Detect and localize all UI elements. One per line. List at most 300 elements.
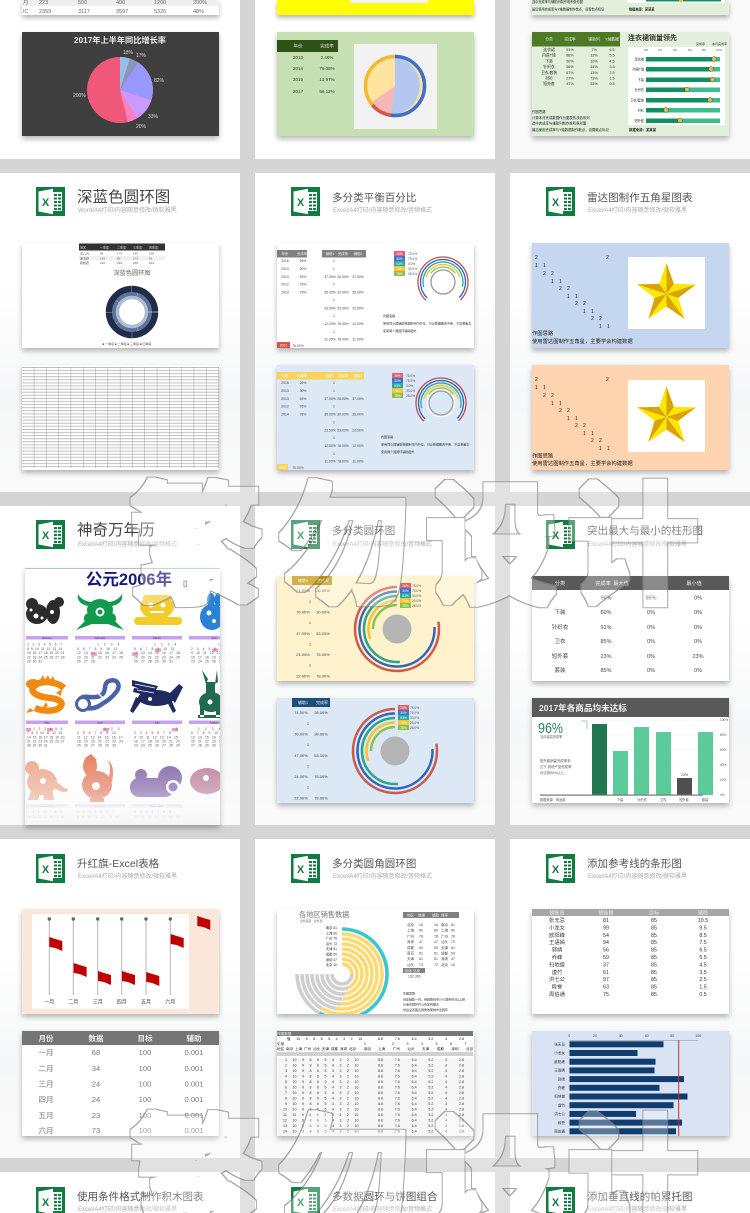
table rows: 100 xyxy=(139,1080,151,1088)
table rows: 扫地僧 xyxy=(549,960,565,968)
legend: 75.0% xyxy=(412,589,421,593)
table: year and completion: 26% xyxy=(300,259,306,263)
table: category data: 2.5 xyxy=(609,71,615,75)
panel: bar chart fragment: 选中完成率与辅助列制作堆积条形图 xyxy=(532,0,583,4)
table: year and completion: 1 xyxy=(333,282,335,286)
icon: zodiac pig xyxy=(190,768,224,794)
data table: 78 xyxy=(434,934,438,938)
text: notes: 使用两个圆圆环辅助图外 xyxy=(383,328,417,333)
icon: zodiac dragon xyxy=(26,675,64,713)
calendar: first row of months: February xyxy=(94,636,106,640)
text: notes xyxy=(383,313,471,333)
header: 深蓝色圆环图 xyxy=(36,187,177,216)
text: notes: 使用同心圆辅助数据制作内外位，可让数据图表平衡，不显著差太 xyxy=(381,442,469,446)
stacked bar chart: 针织衣 xyxy=(634,87,645,92)
header: 多数据圆环与饼图组合: Excel/A4打印/内容随意修改/音频格式 xyxy=(333,1207,432,1213)
chart: concentric arcs xyxy=(408,247,478,317)
table: year and completion: 2014 xyxy=(281,412,289,416)
table rows: 短外套 xyxy=(552,652,569,660)
sheet header rows xyxy=(277,1031,481,1056)
data table: 47 xyxy=(451,957,455,961)
table: helper values: 26.00% xyxy=(314,710,328,715)
table: helper values: 完成率 xyxy=(316,699,328,705)
table: category data: 7% xyxy=(591,48,597,52)
data table: 50 xyxy=(434,946,438,950)
table: category data: 13% xyxy=(590,71,598,75)
panel: empty spreadsheet grid xyxy=(22,365,219,470)
table: helper values: 26.00% xyxy=(316,588,330,593)
table: quarterly data: 二季度 xyxy=(117,244,126,250)
data table: 80 xyxy=(451,929,455,933)
table rows: 63 xyxy=(603,985,609,991)
table rows: 37 xyxy=(603,962,609,968)
text: notes: 作图思路 xyxy=(532,452,554,460)
card: row 4 right xyxy=(510,1172,750,1213)
table rows: 94 xyxy=(603,940,609,946)
axis: 0 xyxy=(568,1034,570,1038)
number series: 1 xyxy=(551,279,554,285)
number series: 1 xyxy=(607,324,610,330)
table: helper values: 74.00% xyxy=(294,710,308,715)
legend: 28.0% xyxy=(406,394,415,398)
table rows: 85 xyxy=(651,970,657,976)
number series: 1 xyxy=(567,416,570,422)
legend: 76% xyxy=(400,721,407,725)
table: year and completion: 37.00% xyxy=(352,397,364,401)
text: notes: 然后设置图表圆角效果制作出圆环 xyxy=(403,1007,448,1012)
calendar: first row of months: January xyxy=(42,636,53,640)
sheet header rows: 地区 南京 上海 广州 汕头 天津 成都 深圳 北京 xyxy=(277,1046,356,1051)
panel: rounded radial chart xyxy=(277,909,474,1014)
table: quarterly data: 地区 xyxy=(80,244,86,250)
tag: 2017 value xyxy=(277,464,304,470)
pie labels: 82% xyxy=(154,78,165,84)
number series: 1 xyxy=(591,431,594,437)
panel: max and min table xyxy=(532,576,729,681)
text: notes xyxy=(403,990,465,1012)
table: helper values: 1 xyxy=(309,642,312,646)
table rows: 二月 xyxy=(38,1064,54,1073)
table: year and completion: 23.50% xyxy=(352,306,364,310)
data table: 81 xyxy=(419,952,423,956)
header: 多分类圆环图: Excel/A4打印/内容随意修改/音频格式 xyxy=(333,542,432,548)
header: 添加垂直线的帕累托图: 添加垂直线的帕累托图 xyxy=(587,1191,692,1203)
table header: 分类 xyxy=(555,579,565,587)
panel: perpetual calendar xyxy=(25,568,220,825)
donut chart: navy rings xyxy=(109,289,155,335)
text: description xyxy=(540,758,572,775)
text: notes: 作图思路 xyxy=(403,990,415,996)
table: year and completion: 1 xyxy=(333,298,335,302)
panel: bar chart with reference line xyxy=(532,1031,729,1136)
data table: 南京 xyxy=(441,922,448,927)
table: completion rate by year: 完成率 xyxy=(320,42,334,50)
data table: 73 xyxy=(451,940,455,944)
calendar: third row of months: 10 11 12 13 14 15 16 xyxy=(134,815,180,819)
legend: 75.0% xyxy=(406,374,415,378)
table: year and completion: 35.00% xyxy=(352,290,364,294)
watermark: repeated outlined brand text: 繁 xyxy=(131,474,261,620)
number series: 2 xyxy=(567,408,570,414)
table rows: 三月 xyxy=(38,1080,54,1088)
data table: 50 xyxy=(419,946,423,950)
panel: partial data table top left: 48% xyxy=(193,9,204,15)
panel: bar chart fragment: 最后使用完成率与Y轴数据制作散点，设置散点标记 xyxy=(532,6,605,12)
sheet data rows: 12 10 9 8 6 5 4 3 2 10 xyxy=(283,1118,358,1122)
pie labels xyxy=(73,50,165,130)
table rows: 0% xyxy=(647,639,655,645)
table header: 月份 xyxy=(38,1033,54,1043)
table: category data: 分类 xyxy=(545,36,553,42)
stacked bar chart: 0% xyxy=(644,48,648,52)
table rows: 一月 xyxy=(38,1048,54,1057)
table rows: 85 xyxy=(651,962,657,968)
axis labels: 短外套 xyxy=(679,797,690,802)
table: helper values: 30.00% xyxy=(316,610,330,614)
table header: 销售员 xyxy=(549,910,565,916)
calendar: first row of months: April xyxy=(211,636,217,640)
stacked bar chart: 2% xyxy=(658,48,662,52)
table rows: 虚竹 xyxy=(552,968,563,976)
table rows: 0.001 xyxy=(184,1080,204,1088)
panel: dark pie chart xyxy=(22,32,219,136)
data table: 辅助 xyxy=(432,912,440,918)
table: year and completion: 26.00% xyxy=(337,397,349,401)
panel: navy donut chart xyxy=(22,243,219,348)
table rows: 100 xyxy=(139,1111,151,1120)
data table: 50 xyxy=(451,952,455,956)
header: 升红旗-Excel表格 xyxy=(36,854,177,883)
table: category data: 53% xyxy=(590,82,598,86)
header: 使用条件格式制作积木图表: 使用条件格式制作积木图表 xyxy=(77,1191,204,1203)
table: helper values: 47.00% xyxy=(296,631,310,636)
table rows: 60% xyxy=(600,610,612,616)
table rows: 六月 xyxy=(38,1125,54,1135)
table: helper values: 1 xyxy=(307,742,310,747)
bar labels: 周伯通 xyxy=(554,1128,565,1134)
card: row 0 right xyxy=(510,0,750,159)
legend xyxy=(392,373,415,398)
panel: dress sales chart xyxy=(532,32,729,136)
number series: 2 xyxy=(559,286,562,292)
legend: 33.0% xyxy=(410,716,419,720)
table: year and completion: 完成率 xyxy=(338,373,349,378)
legend: 30% xyxy=(402,589,409,593)
table: helper values: 1 xyxy=(309,599,312,604)
data table: 天津 xyxy=(441,945,448,950)
bar labels: 洪七公 xyxy=(554,1111,565,1116)
legend: 26% xyxy=(394,374,401,378)
number series: 1 xyxy=(599,324,602,330)
number series: 1 xyxy=(543,385,546,391)
legend xyxy=(696,41,727,46)
legend: 75.0% xyxy=(412,584,421,588)
legend: 53% xyxy=(396,262,403,266)
bar labels xyxy=(554,1042,565,1134)
legend: 33.0% xyxy=(408,267,417,271)
table rows: 小龙女 xyxy=(549,923,565,931)
calendar: first row of months: 12 13 14 15 16 17 18 xyxy=(134,651,180,655)
table: category data: Y轴数据 xyxy=(605,36,619,42)
table rows: 100 xyxy=(139,1048,151,1057)
number series: 2 xyxy=(599,316,602,322)
icon: zodiac tiger xyxy=(134,595,182,625)
number series: 1 xyxy=(583,431,586,437)
table: helper values: 24.00% xyxy=(296,652,310,657)
table rows: 周伯通 xyxy=(549,990,566,998)
number series: 2 xyxy=(599,438,602,444)
data table: 16 xyxy=(419,923,423,927)
header: 使用条件格式制作积木图表: Excel/A4打印/内容随意修改/微软雅黑 xyxy=(78,1207,177,1213)
data table: 上海 xyxy=(441,928,448,933)
pie labels: 17% xyxy=(136,53,147,59)
table: year and completion: 37.00% xyxy=(324,397,336,401)
table: category data: 0.5 xyxy=(609,82,615,86)
table header: 目标 xyxy=(138,1033,153,1043)
table rows: 99 xyxy=(603,925,609,931)
legend: 26% xyxy=(402,584,409,588)
header: 多分类圆环图: 多分类圆环图 xyxy=(332,525,395,537)
table rows: 0% xyxy=(647,668,655,674)
table rows: 欧阳峰 xyxy=(549,931,566,939)
callout: 96%: 96% xyxy=(538,720,563,737)
data table: 北京 xyxy=(407,922,414,927)
calendar: second row of months: June xyxy=(97,720,103,724)
text: notes: 创建辅助一列，用圆角线条SVG填制作5位上层 xyxy=(403,996,465,1002)
table rows: 85 xyxy=(651,948,657,954)
panel: column chart with highlights xyxy=(532,698,729,803)
panel: partial data table top left: 200% xyxy=(193,0,207,6)
poles xyxy=(49,919,170,995)
ring labels: 广州 78 xyxy=(326,936,337,941)
table rows: 0% xyxy=(647,625,655,631)
legend: 30% xyxy=(400,711,407,715)
table: year and completion: 2012 xyxy=(281,282,289,286)
icon: zodiac horse xyxy=(130,680,183,713)
table: year and completion: 2012 xyxy=(281,404,289,408)
calendar: second row of months: 16 17 18 19 20 21 22 xyxy=(134,739,180,743)
data table: 地区 xyxy=(407,912,414,918)
table: completion rate by year: 2013 xyxy=(293,55,304,60)
data table: 起始 结束 xyxy=(405,968,420,973)
table: helper values: 24.00% xyxy=(294,774,308,779)
panel: partial data table top left: 400 xyxy=(116,0,125,6)
table: quarterly data: 三季度 xyxy=(133,244,142,250)
calendar: second row of months: August xyxy=(210,720,219,724)
axis: 100 xyxy=(695,1034,701,1038)
calendar: third row of months: September xyxy=(40,804,54,808)
watermark: repeated outlined brand text: 勿 xyxy=(280,474,410,620)
legend: 30% xyxy=(394,379,401,383)
table: year and completion: 1 xyxy=(333,404,335,408)
table: year and completion: 30.00% xyxy=(337,290,349,294)
table rows: 23 xyxy=(92,1111,100,1120)
axis labels: 卫衣 xyxy=(660,797,667,802)
table rows xyxy=(549,916,708,998)
panel: bar chart fragment xyxy=(532,0,729,15)
data table: 132 360 xyxy=(408,974,421,978)
calendar: first row of months: 5 6 7 8 9 10 11 xyxy=(77,647,117,651)
legend: 78% xyxy=(396,272,403,276)
table: year and completion: 37.00% xyxy=(352,275,364,279)
table: year and completion: 完成率 xyxy=(338,251,349,256)
panel: partial data table top left: 1200 xyxy=(154,0,166,6)
text: chart notes: 作图思路 xyxy=(532,109,546,114)
header: 深蓝色圆环图: Word/A4打印/内容随意修改/微软雅黑 xyxy=(78,208,177,214)
data table: 78 xyxy=(419,934,423,938)
sheet header rows: 值 10 9 8 6 5 4 3 2 10 xyxy=(287,1036,362,1041)
number series: 2 xyxy=(551,271,554,277)
table rows: 54 xyxy=(603,933,609,939)
header: 添加参考线的条形图 xyxy=(546,854,687,883)
table: quarterly data: 王八凡 xyxy=(80,252,89,256)
header: 使用条件格式制作积木图表 xyxy=(36,1187,204,1213)
table: year and completion: 37.00% xyxy=(324,275,336,279)
table: helper values: 76.00% xyxy=(314,774,328,779)
table rows: 0.001 xyxy=(184,1064,204,1073)
panel: partial data table top left xyxy=(22,0,219,15)
sheet data rows: 1 10 9 8 6 5 4 3 2 10 xyxy=(285,1058,358,1062)
number series: 1 xyxy=(583,309,586,315)
calendar: first row of months: 1 2 3 4 5 6 7 xyxy=(27,643,62,647)
table rows: 85 xyxy=(651,925,657,931)
header: 雷达图制作五角星图表: Excel/A4打印/内容随意修改/微软雅黑 xyxy=(588,208,687,214)
axis labels: 60% xyxy=(720,748,727,752)
sheet header rows: 1 xyxy=(364,1042,366,1046)
text: notes xyxy=(381,434,469,454)
table: helper values: 76.00% xyxy=(316,652,330,657)
column chart xyxy=(540,724,713,796)
text: chart notes xyxy=(532,109,657,132)
table rows: 3.5 xyxy=(699,970,707,976)
calendar: third row of months: 3 4 5 6 7 8 9 xyxy=(27,810,62,814)
calendar: second row of months: 28 29 30 31 xyxy=(27,744,48,748)
text: notes: 使用两个圆圆环辅助图外 xyxy=(381,449,415,454)
table: year and completion: 1 xyxy=(333,452,335,456)
text: chart notes: 选中完成率与辅助列制作堆积条形图 xyxy=(532,120,587,126)
panel: green donut chart xyxy=(277,32,474,136)
stacked bar chart: 卫衣/套装 xyxy=(630,98,645,102)
chart: concentric arcs xyxy=(348,580,446,678)
icon: zodiac snake xyxy=(76,680,119,710)
calendar: second row of months: 1 2 3 xyxy=(104,727,120,731)
calendar: third row of months: 1 2 3 4 5 6 7 xyxy=(77,810,114,814)
panel: partial data table top left: 3597 xyxy=(116,9,128,15)
sheet data rows: 4 10 9 8 6 5 4 3 2 10 xyxy=(285,1074,358,1078)
table: category data: 6.5 xyxy=(609,48,615,52)
table: year and completion: 78.00% xyxy=(337,460,349,464)
pie chart xyxy=(87,57,153,123)
heading: chart title: 2017年各商品均未达标 xyxy=(539,702,627,713)
ring labels: 上海 80 xyxy=(326,930,337,935)
table: category data: 连衣裙 xyxy=(543,47,555,52)
calendar: second row of months: 11 12 13 14 15 16 17 xyxy=(77,735,123,739)
header: 突出最大与最小的柱形图: X xyxy=(552,530,560,542)
calendar: second row of months: 18 19 20 21 22 23 24 xyxy=(77,739,123,743)
panel: yellow chart fragment xyxy=(277,0,474,15)
panel: partial data table top left: 3117 xyxy=(78,9,90,15)
sheet data rows xyxy=(283,1058,481,1134)
header: 突出最大与最小的柱形图: 突出最大与最小的柱形图 xyxy=(587,525,703,537)
table rows: 100 xyxy=(139,1095,151,1104)
tag: 2017 value: 75.00% xyxy=(292,466,304,470)
bar labels: 张无忌 xyxy=(554,1042,565,1046)
table: quarterly data: 204 xyxy=(149,261,154,265)
sheet data rows: 11 10 9 8 6 5 4 3 2 10 xyxy=(283,1113,358,1117)
table: year and completion: 2014 xyxy=(281,290,289,294)
legend: 75.0% xyxy=(410,706,419,710)
calendar: second row of months: 2 3 4 5 6 7 8 xyxy=(134,731,171,735)
table rows: 乔峰 xyxy=(552,953,563,961)
table rows: 96% xyxy=(600,596,612,602)
table: quarterly data: 一季度 xyxy=(100,244,109,250)
number series: 1 xyxy=(599,446,602,452)
month labels: 二月 xyxy=(68,1000,78,1006)
panel: raise the red flag chart xyxy=(22,909,219,1014)
table header xyxy=(555,579,702,587)
card: row 3 left xyxy=(0,839,240,1158)
legend: 53% xyxy=(402,594,409,598)
table rows: 6.5 xyxy=(699,948,707,954)
calendar: first row of months xyxy=(26,636,237,663)
radial bars xyxy=(281,913,403,1035)
sheet header rows: 南京 xyxy=(364,1046,372,1051)
calendar: first row of months: 22 23 24 25 26 27 28 xyxy=(27,655,65,659)
data table: 上海 xyxy=(407,928,414,933)
legend: 28.0% xyxy=(412,604,421,608)
table rows: 85% xyxy=(600,639,612,645)
header: 突出最大与最小的柱形图 xyxy=(546,520,703,549)
text: notes: 使用同心圆辅助数据制作内外位，可让数据图表平衡，不显著差太 xyxy=(383,320,471,326)
calendar: first row of months: 19 20 21 22 23 24 25 xyxy=(134,655,180,659)
sheet header rows: 上海 广州 汕头 天津 成都 深圳 北京 xyxy=(378,1046,474,1051)
calendar: first row of months: 26 27 28 xyxy=(77,659,95,663)
month labels: 四月 xyxy=(117,1000,127,1006)
table rows: 洪七公 xyxy=(549,975,566,983)
table: completion rate by year: 2017 xyxy=(293,89,304,94)
table rows: 卫衣 xyxy=(554,637,566,645)
table: category data: 73% xyxy=(590,76,598,80)
table rows: 下装 xyxy=(554,608,566,616)
heading: regional sales: 各地区销售数据 xyxy=(299,910,349,919)
calendar: first row of months: 1 2 3 4 xyxy=(154,643,176,647)
icon: zodiac rat xyxy=(26,597,64,624)
table: category data: 4.5 xyxy=(609,59,615,63)
table: category data: 短外套 xyxy=(543,81,555,86)
legend: ■ 一季度 ■ 二季度 ■ 三季度 ■ 四季度 xyxy=(102,341,152,346)
table: helper values: 辅助1 xyxy=(298,699,309,705)
legend: 75.0% xyxy=(408,257,417,261)
header: 多分类圆角圆环图: X xyxy=(297,864,305,876)
table: year and completion: 2013 xyxy=(281,389,289,393)
table: category data: 3.5 xyxy=(609,65,615,69)
stacked bar chart: 衬衫 xyxy=(638,108,645,112)
ring labels: 成都 50 xyxy=(326,952,337,956)
table: year and completion: 53% xyxy=(300,275,306,279)
table rows: 0.001 xyxy=(184,1095,204,1104)
calendar: second row of months: 21 22 23 24 25 26 27 xyxy=(27,739,65,743)
data table: 81 xyxy=(434,952,438,956)
table header xyxy=(38,1033,202,1043)
data table: 61 xyxy=(419,957,423,961)
axis labels: 针织衣 xyxy=(637,797,648,802)
panel: partial data table top left: 5326 xyxy=(154,9,166,15)
text: chart notes: 最后使用完成率与Y轴数据制作散点，设置散点标记 xyxy=(532,127,609,132)
bars xyxy=(570,1041,688,1134)
table: year and completion: 53.00% xyxy=(337,306,349,310)
number series: 1 xyxy=(535,263,538,269)
calendar: second row of months: 14 15 16 17 18 19 20 xyxy=(27,735,65,739)
